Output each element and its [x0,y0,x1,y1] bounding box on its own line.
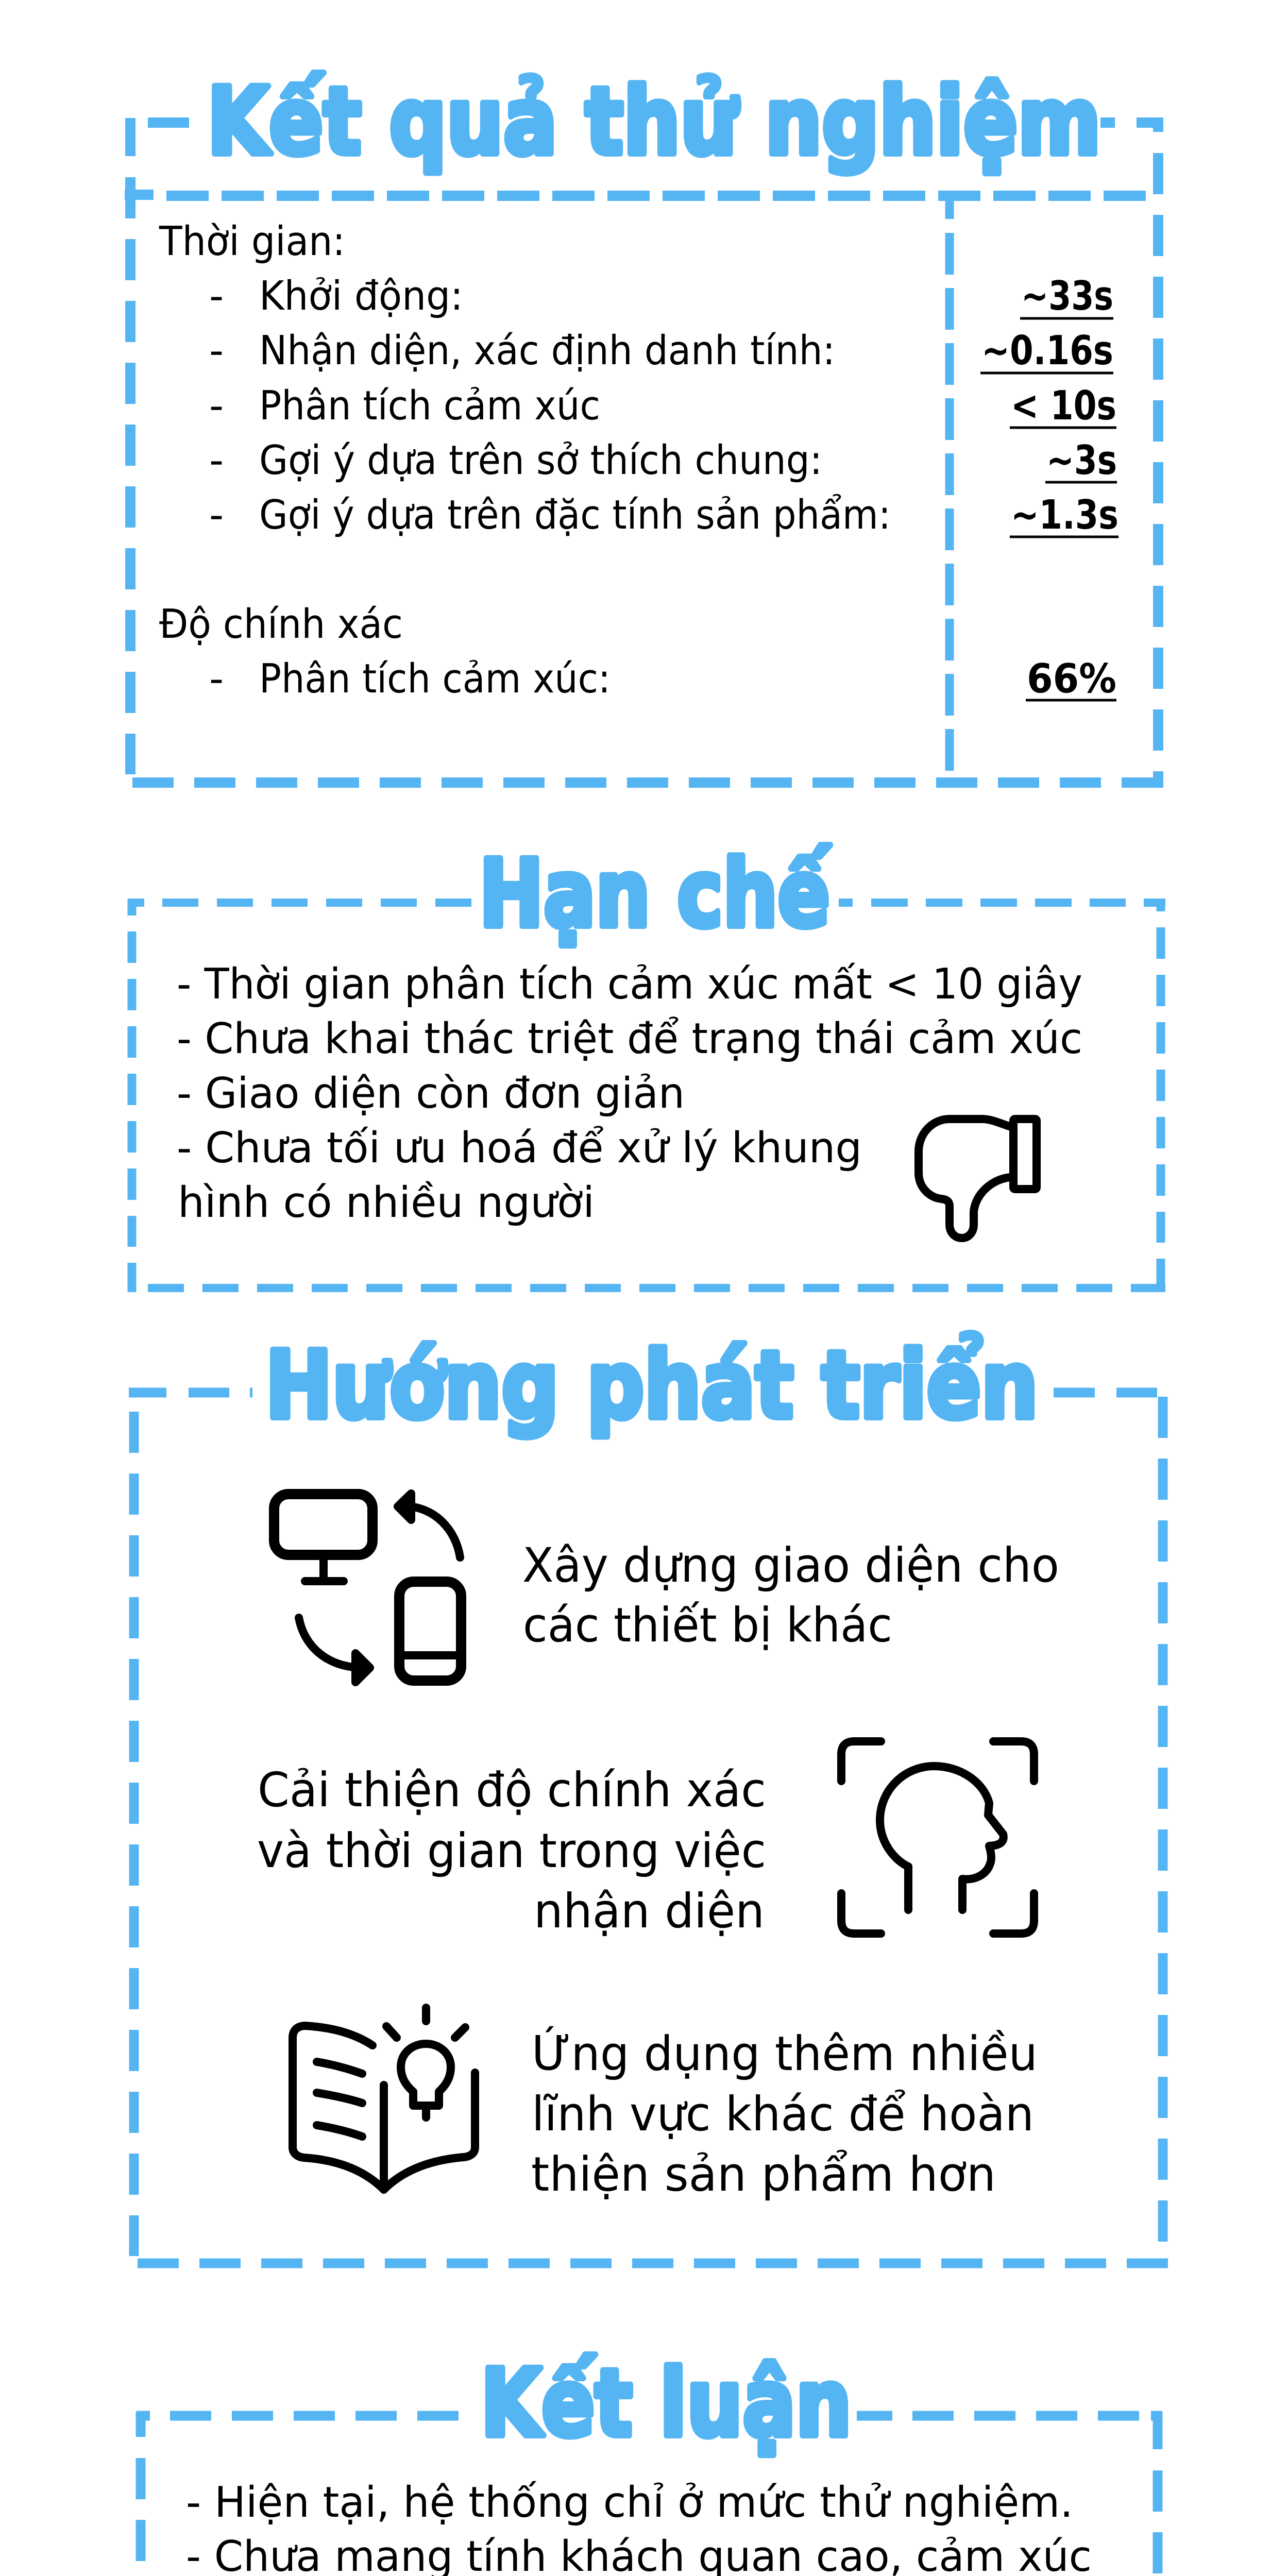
text: improve accuracy and time: nhận diện [534,1884,765,1939]
text: apply to more fields: thiện sản phẩm hơn [531,2147,996,2202]
text block: limitations list: - Chưa tối ưu hoá để xử lý khung [177,1124,862,1173]
text block: limitations list: - Thời gian phân tích cảm xúc mất < 10 giây [177,960,1082,1009]
values: measured results [980,273,1118,702]
text block: timing and accuracy list: - [209,492,224,538]
panel: conclusion [135,2350,1163,2576]
text block: limitations list: hình có nhiều người [178,1178,595,1227]
text block: timing and accuracy list: Độ chính xác [159,601,403,648]
text block: timing and accuracy list: Phân tích cảm xúc [259,383,600,429]
text: build interface for other devices: Xây dựng giao diện cho [522,1538,1059,1593]
text: apply to more fields: Ứng dụng thêm nhiều [532,2026,1038,2081]
icon: thumbs down [919,1119,1037,1238]
text block: limitations list [177,960,1082,1227]
text: improve accuracy and time: và thời gian trong việc [257,1823,766,1878]
text: apply to more fields: lĩnh vực khác để hoàn [532,2087,1034,2142]
values: measured results: ~33s [1021,273,1113,319]
text block: timing and accuracy list: Gợi ý dựa trên sở thích chung: [259,437,822,484]
text block: limitations list: - Chưa khai thác triệt để trạng thái cảm xúc [177,1014,1082,1063]
text: build interface for other devices [522,1538,1059,1653]
heading: test results: Kết quả thử nghiệm [207,68,1101,176]
panel: test results [125,68,1163,788]
values: measured results: ~3s [1046,437,1117,484]
values: measured results: ~1.3s [1011,492,1118,538]
text block: timing and accuracy list: Khởi động: [259,273,463,319]
text block: timing and accuracy list: - [209,656,224,702]
text: apply to more fields [531,2026,1038,2202]
text block: conclusion [186,2478,1118,2576]
text block: timing and accuracy list [159,218,891,702]
icon: devices sync [274,1494,461,1682]
text block: timing and accuracy list: - [209,328,224,374]
heading: development directions: Hướng phát triển [265,1332,1038,1439]
text: build interface for other devices: các thiết bị khác [523,1598,892,1653]
text: improve accuracy and time: Cải thiện độ chính xác [258,1762,766,1818]
icon: face scan [841,1741,1034,1934]
values: measured results: ~0.16s [981,328,1113,374]
panel: limitations [128,840,1165,1292]
text block: timing and accuracy list: - [209,437,224,484]
text block: timing and accuracy list: Thời gian: [159,218,345,265]
text block: timing and accuracy list: Gợi ý dựa trên đặc tính sản phẩm: [259,492,891,538]
text: improve accuracy and time [257,1762,766,1939]
values: measured results: < 10s [1011,383,1116,429]
panel: development directions [129,1332,1168,2263]
text block: conclusion: - Hiện tại, hệ thống chỉ ở mức thử nghiệm. [186,2478,1073,2527]
heading: conclusion: Kết luận [481,2350,852,2458]
heading: limitations: Hạn chế [479,840,831,948]
text block: timing and accuracy list: - [209,383,224,429]
icon: book with light bulb [293,2008,475,2190]
text block: timing and accuracy list: Phân tích cảm xúc: [259,656,611,702]
text block: limitations list: - Giao diện còn đơn giản [177,1069,685,1118]
text block: timing and accuracy list: Nhận diện, xác định danh tính: [259,328,835,374]
values: measured results: 66% [1027,656,1116,702]
text block: timing and accuracy list: - [209,273,224,319]
